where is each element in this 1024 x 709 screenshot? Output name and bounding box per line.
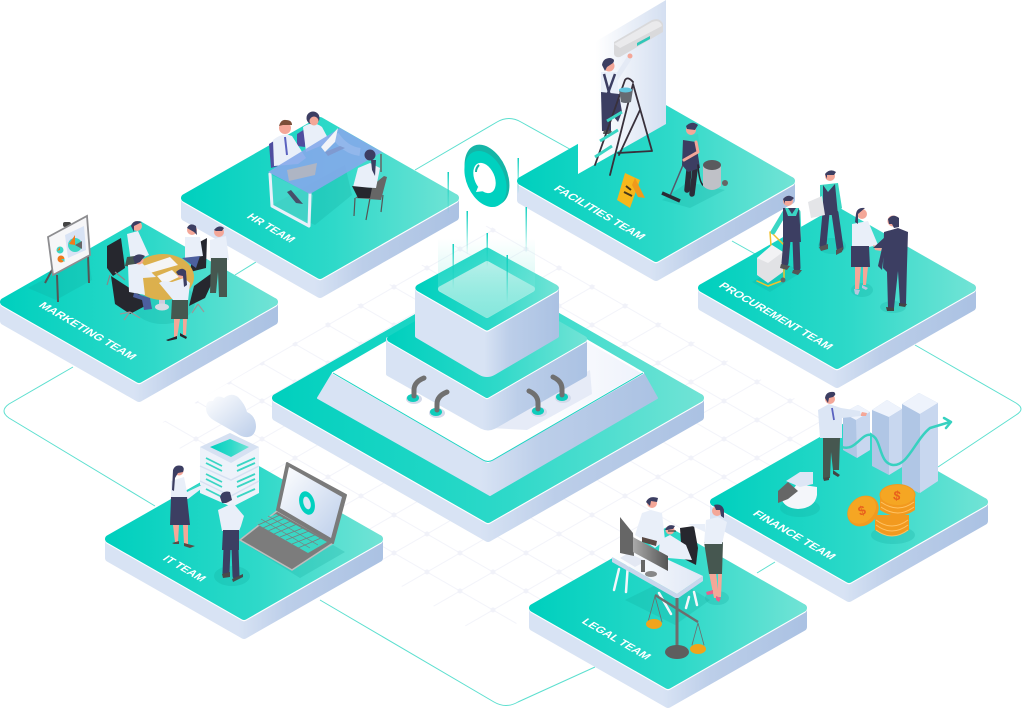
pie chart: [778, 472, 820, 517]
Finance team label: FINANCE TEAM: [750, 509, 838, 562]
Procurement platform: [702, 211, 972, 384]
growth arrow: [842, 418, 951, 465]
man in suit shaking hands: [873, 216, 908, 313]
HR platform: [185, 121, 455, 294]
middle tier: [388, 283, 592, 430]
standing woman: [688, 505, 729, 605]
woman with tablet: [170, 466, 205, 548]
wall with air conditioner: [578, 0, 666, 174]
panel: Legal team: [533, 497, 803, 704]
technician on ladder: [595, 54, 652, 175]
desk with monitors and staff: [612, 497, 710, 625]
scales of justice: [646, 595, 706, 659]
bar chart: [843, 393, 938, 493]
cleaner with vacuum: [662, 123, 728, 208]
base tier: [276, 277, 700, 538]
woman shaking hands: [851, 208, 878, 297]
server stack: [200, 433, 259, 507]
panel: HR team: [185, 112, 455, 294]
worker with box: [808, 170, 846, 255]
Procurement team label: PROCUREMENT TEAM: [716, 281, 835, 352]
coins: $: [892, 488, 902, 504]
laptop: [240, 463, 346, 578]
man in white shirt: [214, 492, 250, 586]
HR team label: HR TEAM: [244, 212, 297, 245]
white sloped tier: [318, 283, 657, 495]
central platform: [276, 138, 700, 538]
icon: cloud: [206, 395, 256, 437]
IT platform: [109, 462, 379, 635]
Facilities team label: FACILITIES TEAM: [551, 184, 647, 242]
panel: Finance team: [714, 392, 984, 598]
background grid: [150, 225, 850, 640]
coins: $: [856, 502, 869, 519]
wet floor sign: [617, 173, 645, 208]
meeting table and team: [107, 221, 229, 341]
HR illustration: meeting table: [268, 112, 387, 226]
light beam: [438, 158, 535, 318]
Legal platform: [533, 531, 803, 704]
Finance platform: [714, 425, 984, 598]
Marketing team label: MARKETING TEAM: [36, 301, 139, 362]
top cube: [417, 251, 557, 375]
pipes: [406, 377, 571, 418]
presentation board: [28, 216, 92, 302]
Facilities platform: [521, 104, 791, 277]
presenter: [818, 392, 867, 481]
panel: IT team: [109, 395, 379, 635]
panel: Marketing team: [4, 216, 274, 398]
Legal team label: LEGAL TEAM: [579, 617, 653, 662]
Marketing platform: [4, 225, 274, 398]
coins: [841, 484, 915, 544]
panel: Facilities team: [521, 0, 791, 277]
panel: Procurement team: [702, 170, 972, 384]
worker with cart: [752, 196, 802, 292]
icon: chat ring: [456, 138, 518, 214]
IT team label: IT TEAM: [160, 554, 208, 584]
